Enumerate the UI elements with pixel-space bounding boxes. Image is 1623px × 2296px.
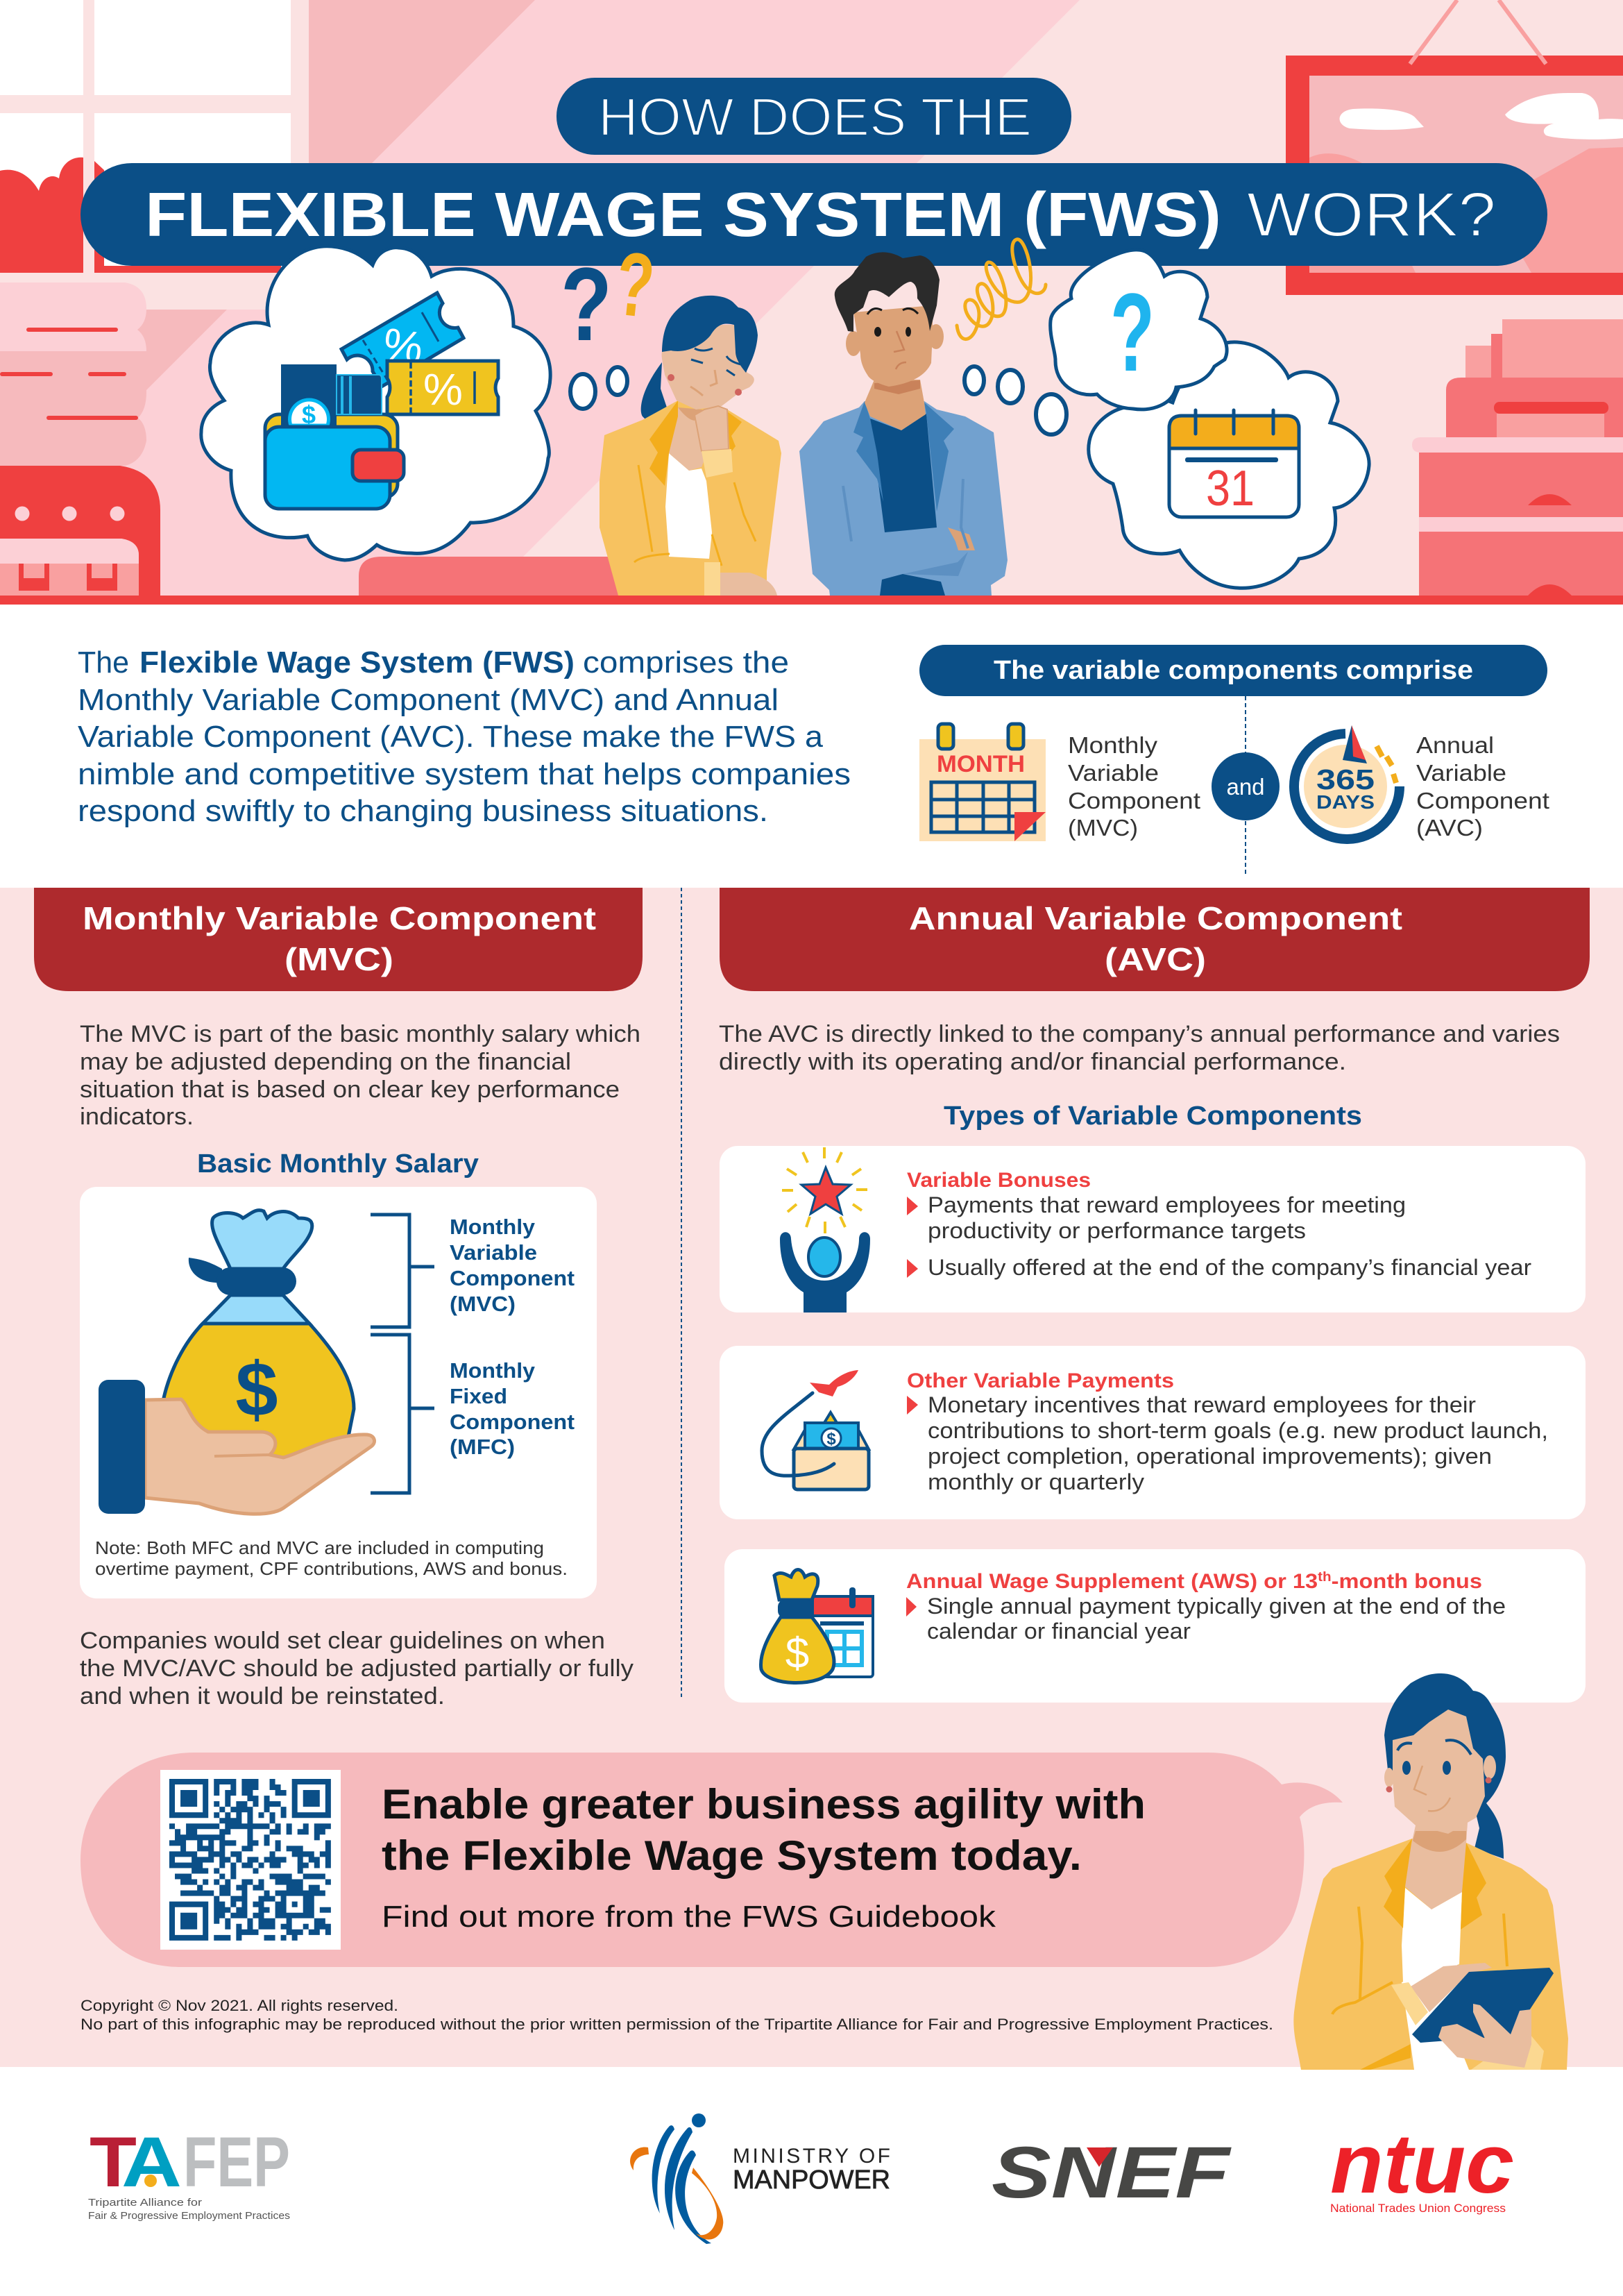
logo: TAFEP: FEP	[183, 2122, 290, 2202]
card text: Payments that reward employees for meeting	[928, 1192, 1406, 1217]
text: MVC description: may be adjusted depending on the financial	[80, 1049, 571, 1075]
logo: Ministry of Manpower: MANPOWER	[733, 2166, 890, 2195]
bench	[359, 557, 624, 597]
note: overtime payment, CPF contributions, AWS and bonus.	[95, 1558, 568, 1579]
title: how does the: HOW DOES THE	[598, 87, 1032, 147]
text: guidelines: and when it would be reinstated.	[80, 1683, 445, 1710]
label: annual variable component: Annual	[1416, 732, 1494, 758]
icon: blue voucher	[341, 293, 464, 387]
logo: Ministry of Manpower	[630, 2113, 890, 2244]
card text: Annual Wage Supplement (AWS) or 13	[906, 1570, 1285, 1593]
pink content background	[0, 888, 1623, 2067]
title: flexible wage system: WORK?	[1247, 180, 1496, 250]
card text	[907, 1169, 1531, 1280]
panel: salary breakdown card	[80, 1187, 597, 1598]
panel header: monthly variable component: Monthly Variable Component	[83, 900, 596, 936]
thought cloud: wallet and vouchers	[201, 246, 550, 560]
badge: and: and	[1226, 774, 1265, 800]
panel: variable bonuses	[720, 1146, 1586, 1312]
panel: other variable payments	[720, 1346, 1586, 1519]
logo: TAFEP: Fair & Progressive Employment Practices	[88, 2210, 290, 2222]
call to action banner	[80, 1753, 1343, 1967]
intro paragraph: Variable Component (AVC). These make the FWS a	[78, 720, 824, 754]
icon: scribble	[957, 239, 1046, 339]
labels: MVC: (MVC)	[450, 1292, 516, 1316]
label: monthly variable component: Monthly	[1068, 732, 1158, 758]
label: monthly variable component: Component	[1068, 788, 1200, 813]
banner subtext: Find out more from the FWS Guidebook	[382, 1900, 996, 1934]
panel header: monthly variable component	[34, 888, 643, 991]
panel header: annual variable component: Annual Variable Component	[909, 900, 1402, 936]
icon: monthly calendar: MONTH	[937, 751, 1025, 777]
intro paragraph: respond swiftly to changing business situations.	[78, 794, 768, 828]
character: thinking woman	[600, 296, 781, 596]
icon: blue voucher: %	[380, 318, 426, 373]
icon: 365 days dial: 365	[1316, 763, 1375, 795]
heading pill: the variable components comprise: The variable components comprise	[994, 656, 1473, 685]
text: AVC description: The AVC is directly linked to the company’s annual performance and varies	[719, 1021, 1560, 1047]
framed picture	[1286, 0, 1623, 295]
label: annual variable component: Component	[1416, 788, 1549, 813]
text: AVC description: directly with its operating and/or financial performance.	[719, 1049, 1346, 1075]
title: flexible wage system	[80, 163, 1547, 266]
note: Note: Both MFC and MVC are included in computing	[95, 1537, 544, 1558]
icon: monthly calendar	[919, 724, 1046, 841]
labels: MVC: Monthly	[450, 1215, 536, 1239]
icon: money bag on hand: $	[235, 1347, 278, 1433]
banner headline	[382, 1781, 1146, 1879]
label: annual variable component: (AVC)	[1416, 815, 1483, 841]
heading: basic monthly salary: Basic Monthly Salary	[197, 1149, 479, 1179]
label: monthly variable component: Variable	[1068, 760, 1159, 786]
icon: yellow voucher	[387, 361, 498, 414]
icon: calendar 31	[1169, 410, 1299, 517]
icon: calendar 31: 31	[1206, 461, 1255, 516]
stacked towels	[0, 282, 146, 466]
hero background: room	[0, 0, 1623, 605]
panel header: annual variable component: (AVC)	[1105, 941, 1206, 977]
icon: envelope with paper plane: $	[826, 1430, 836, 1449]
copyright note	[80, 1997, 1273, 2033]
icon: question marks: ?	[561, 246, 612, 362]
labels: MVC	[450, 1215, 575, 1316]
icon: bag with calendar	[761, 1570, 873, 1683]
labels: MFC: Fixed	[450, 1384, 507, 1408]
banner headline: Enable greater business agility with	[382, 1781, 1146, 1827]
icon: money bag on hand	[99, 1210, 375, 1514]
card text: contributions to short-term goals (e.g. new product launch,	[928, 1418, 1548, 1443]
card text: Variable Bonuses	[907, 1169, 1091, 1192]
panel header: annual variable component	[720, 888, 1590, 991]
card text: Single annual payment typically given at the end of the	[927, 1594, 1506, 1619]
logo: NTUC: National Trades Union Congress	[1330, 2202, 1506, 2215]
icon: wallet	[265, 364, 404, 509]
icon: 365 days dial: DAYS	[1316, 791, 1375, 813]
label: annual variable component	[1416, 732, 1549, 841]
note	[95, 1537, 568, 1579]
icon: yellow voucher: %	[423, 364, 463, 414]
logo: SNEF: SNEF	[992, 2132, 1232, 2213]
window	[0, 0, 347, 390]
labels: MVC: Component	[450, 1266, 575, 1290]
card text: Monetary incentives that reward employees for their	[928, 1392, 1476, 1417]
card text: project completion, operational improvements); given	[928, 1444, 1492, 1469]
card text	[906, 1570, 1506, 1644]
text: guidelines	[80, 1628, 634, 1710]
QR code	[160, 1770, 341, 1950]
icon: question marks: ?	[611, 233, 658, 337]
text: MVC description: indicators.	[80, 1104, 194, 1130]
label: monthly variable component: (MVC)	[1068, 815, 1138, 841]
logo: NTUC: ntuc	[1330, 2116, 1514, 2211]
labels: MFC: (MFC)	[450, 1435, 515, 1459]
banner headline: the Flexible Wage System today.	[382, 1832, 1082, 1879]
text: AVC description	[719, 1021, 1560, 1075]
intro paragraph	[78, 645, 851, 828]
copyright note: No part of this infographic may be reproduced without the prior written permission of the Tripartite Alliance for Fair and Progressive Employment Practices.	[80, 2016, 1273, 2033]
card text: productivity or performance targets	[928, 1218, 1306, 1243]
icon: question marks	[561, 233, 658, 362]
icon: person reaching star	[780, 1147, 870, 1312]
icon: 365 days dial	[1294, 725, 1400, 839]
heading: types of variable components: Types of Variable Components	[944, 1101, 1362, 1131]
thought cloud: question mark	[1051, 250, 1227, 410]
card text: Usually offered at the end of the company’s financial year	[928, 1255, 1531, 1280]
logo: TAFEP: Tripartite Alliance for	[88, 2197, 202, 2209]
text: guidelines: the MVC/AVC should be adjusted partially or fully	[80, 1655, 634, 1682]
intro paragraph: nimble and competitive system that helps companies	[78, 757, 851, 791]
labels: MFC: Monthly	[450, 1358, 536, 1383]
logo: TAFEP: T	[90, 2122, 137, 2202]
icon: cyan question mark: ?	[1110, 270, 1155, 394]
text: MVC description: situation that is based on clear key performance	[80, 1077, 620, 1103]
label: annual variable component: Variable	[1416, 760, 1506, 786]
badge: and	[1212, 752, 1280, 820]
icon: envelope with paper plane	[762, 1370, 869, 1489]
thought cloud: calendar	[1089, 342, 1369, 588]
printer and cabinet	[1412, 319, 1623, 597]
title: how does the	[556, 78, 1071, 155]
labels: MVC: Variable	[450, 1240, 537, 1265]
intro paragraph: comprises the	[583, 645, 789, 679]
copyright note: Copyright © Nov 2021. All rights reserved.	[80, 1997, 398, 2014]
card text: calendar or financial year	[927, 1619, 1191, 1644]
heading pill: the variable components comprise	[919, 645, 1547, 696]
icon: thought bubbles	[570, 366, 1067, 434]
title: flexible wage system: FLEXIBLE WAGE SYSTEM (FWS)	[145, 180, 1221, 250]
card text: monthly or quarterly	[928, 1469, 1144, 1494]
logo: Ministry of Manpower: MINISTRY OF	[733, 2145, 890, 2168]
labels: MFC: Component	[450, 1410, 575, 1434]
card text	[907, 1369, 1548, 1494]
card text: th	[1318, 1570, 1332, 1585]
text: MVC description	[80, 1021, 640, 1130]
red armchair	[0, 466, 160, 596]
label: monthly variable component	[1068, 732, 1200, 841]
card text: Other Variable Payments	[907, 1369, 1174, 1392]
card text: -month bonus	[1332, 1570, 1482, 1593]
panel: annual wage supplement	[724, 1549, 1586, 1703]
intro paragraph: The	[78, 645, 129, 679]
text: MVC description: The MVC is part of the basic monthly salary which	[80, 1021, 640, 1047]
labels: MFC	[450, 1358, 575, 1459]
intro paragraph: Monthly Variable Component (MVC) and Annual	[78, 683, 779, 717]
icon: wallet: $	[302, 400, 316, 429]
character: thinking man	[799, 252, 1008, 596]
panel header: monthly variable component: (MVC)	[284, 941, 393, 977]
brackets	[371, 1215, 434, 1493]
logo: TAFEP: A	[121, 2122, 182, 2202]
red floor line	[0, 596, 1623, 605]
logo: TAFEP	[88, 2122, 290, 2222]
text: guidelines: Companies would set clear guidelines on when	[80, 1628, 605, 1654]
intro paragraph: Flexible Wage System (FWS)	[139, 645, 575, 679]
character: woman with tablet	[1293, 1673, 1568, 2070]
icon: bag with calendar: $	[785, 1630, 809, 1678]
